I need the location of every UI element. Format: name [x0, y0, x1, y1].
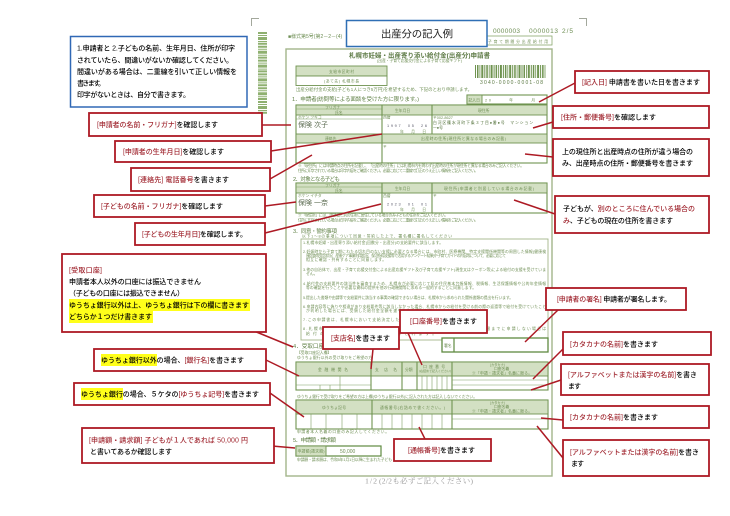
instructions box: 1.申請者と 2.子どもの名前、生年月日、住所が印字 [77, 44, 235, 52]
section 4 bank account: ※「申請・請求者」名義に限る。 [472, 408, 532, 414]
municipality box [296, 66, 387, 86]
callout: entry date: [記入日] 申請書を書いた日を書きます [582, 78, 700, 86]
form intro text: 出産分給付金の支給(子ども1人につき5万円)を希望するため、下記のとおり申請します。 [296, 86, 472, 93]
section 2 child: 西暦 [383, 193, 391, 198]
callout: address and postal code [553, 106, 709, 128]
section 3 consent [293, 227, 548, 340]
form title [349, 50, 491, 63]
section 1 applicant: 保険 次子 [298, 120, 328, 129]
form barcode: 3040-0000-0001-08 [480, 80, 543, 86]
consent items: 相互に確認・共有することに同意します。 [306, 257, 386, 262]
section 2 child: ※「現住所」には、申請者と別の住所に居住している場合のみ子どもの住所をご記入ください。 [298, 212, 448, 218]
callout: receiving account: どちらか１つだけ書きます [69, 312, 152, 321]
callout: child name: [子どもの名前・フリガナ]を確認します [101, 202, 223, 210]
section 4 bank account: 金融機関名 [318, 367, 348, 372]
section 5 requested amount: 申請額(請求額) [298, 448, 325, 454]
consent items: 7.この申請書は、札幌市において支給決定した後は、 [303, 317, 413, 322]
callout: child name [94, 195, 265, 217]
callout: applicant name [89, 113, 262, 136]
consent items: 6.申請内容等に偽りや相違があり支給要件等に該当しなかった場合、札幌市からの給付を受ける前の際の返還等で給付を受けていたこと [303, 304, 546, 309]
section 1 applicant: 西暦 [383, 114, 391, 120]
section 2 child: ホケン イチタ [298, 193, 322, 198]
callout: requested amount: [申請額・請求額] 子どもが１人であれば 50,000 円 [89, 436, 248, 444]
consent items: 1.札幌市妊婦・出産寄り添い給付金(回数分・出産分)の支給要件に該当します。 [303, 240, 443, 245]
section 1 applicant: フリガナ [325, 105, 340, 110]
section 5 requested amount: 5．申請額・請求額 [293, 436, 336, 444]
callout: child birth date [135, 223, 265, 245]
section 5 requested amount: 50,000 [340, 449, 356, 455]
callout: requested amount: と書いてあるか確認します [90, 447, 172, 456]
callout: alphabet or kanji name 1: ます [568, 382, 581, 390]
section 4 bank account: (右詰めで記入ください) [419, 368, 451, 373]
consent items: 5.提出した書類や由請等で支給要件に該当する事実の確認できない場合は、札幌市から求められた関係書類の提出を行います。 [303, 295, 513, 300]
section 2 child: 2023 01 01 [387, 202, 427, 206]
section 4 bank account: 申請者本人名義の口座のみ記入してください。 [297, 429, 389, 434]
section 2 child: フリガナ [325, 183, 340, 188]
callout: katakana name 1: [カタカナの名前]を書きます [570, 340, 658, 348]
instructions box: 間違いがある場合は、二重線を引いて正しい情報を [77, 67, 237, 76]
form title: (出産・子育て応援交付金による子育て応援ギフト) [377, 58, 463, 63]
section 1 applicant: 年 月 日 [400, 129, 426, 134]
callout: receiving account: ゆうちょ銀行以外は上、ゆうちょ銀行は下の欄に書きます [69, 300, 249, 310]
callout: yucho symbol: ゆうちょ銀行の場合、５ケタの[ゆうちょ記号]を書きます [81, 390, 259, 398]
instructions box: されていたら、間違いがないか確認してください。 [77, 56, 233, 64]
section 4 bank account: ゆうちょ銀行以外の受け取りをご希望の方 [297, 355, 372, 360]
section 1 applicant: 氏名 [335, 110, 343, 115]
section 1 applicant: 現住所 [478, 108, 490, 113]
form title: 札幌市妊婦・出産寄り添い給付金(出産分)申請書 [349, 50, 491, 60]
section 4 bank account: 口座名義 [494, 404, 509, 409]
callout: child's address [555, 196, 709, 233]
section 2 child: 氏名 [335, 188, 343, 193]
callout: katakana name 2 [563, 406, 709, 428]
section 4 bank account: (カタカナ) [490, 400, 505, 405]
section 4 bank account [293, 342, 548, 434]
callout: passbook number [394, 439, 491, 461]
consent items: 2.妊娠時から子育て期にわたる切れ目のない支援に必要となる場合には、市町村、医療機関、特定支援関係機関等の周囲した情報(健康検 [303, 249, 546, 254]
section 1 applicant: 記入日 [468, 98, 480, 102]
callout: applicant birth date [115, 141, 271, 162]
municipality box: (あて先) 札幌市長 [324, 78, 359, 84]
callout: katakana name 1 [563, 332, 711, 355]
section 4 bank account: 口座番号 [423, 364, 445, 369]
section 4 bank account: 支店名 [375, 367, 397, 372]
section 1 applicant: 〒 [383, 145, 387, 149]
callout: yucho symbol [74, 383, 270, 405]
form header code [288, 28, 573, 45]
callout: address and postal code: [住所・郵便番号]を確認します [561, 112, 656, 122]
callout: branch name: [支店名]を書きます [331, 334, 390, 342]
section 2 child: 2．対象となる子ども [293, 175, 340, 183]
form header code: 0000003 [493, 28, 520, 35]
form header code: ■様式第5号(第2－2－(4) [288, 33, 342, 40]
form header code: 2/5 [562, 28, 573, 35]
section 4 bank account: 口座名義 [494, 366, 509, 371]
section 3 consent: 以下1〜8の事項について同意・誓約した上で、署名欄に署名してください [302, 234, 452, 238]
side barcode [258, 32, 267, 114]
callout: account number: [口座番号]を書きます [410, 316, 477, 326]
section 1 applicant: 生年月日 [395, 108, 410, 113]
callout: phone contact [131, 168, 270, 191]
instructions box [70, 36, 247, 107]
signature box: 署名 [444, 343, 452, 348]
callout: receiving account: [受取口座] [69, 266, 102, 274]
section 5 requested amount: 申請額・請求額は、令和5年1月1日以降に生まれた子ども [297, 457, 392, 462]
section 4 bank account: 分類 [405, 367, 413, 372]
section 2 child: 現住所(申請者と別居している場合のみ記載) [444, 186, 535, 191]
callout: receiving account [62, 254, 266, 332]
callout: phone contact: [連絡先] 電話番号を書きます [138, 175, 229, 184]
form barcode [475, 72, 546, 86]
municipality box: 支給市区町村 [329, 69, 354, 74]
form outer frame [286, 49, 552, 476]
callout: alphabet or kanji name 1: [アルファベットまたは漢字の名前]を書き [568, 370, 697, 379]
crop marks [252, 18, 586, 26]
section 4 bank account: ※「申請・請求者」名義に限る。 [472, 370, 532, 376]
signature box [442, 338, 548, 352]
section 4 bank account: 【受取口座記入欄】 [297, 350, 331, 355]
section 4 bank account: 通帳番号(右詰めで書ください。) [380, 405, 446, 410]
section 4 bank account: ゆうちょ記号 [322, 405, 346, 410]
form header code: 0000013 [529, 28, 558, 35]
callout: non-yucho bank name [94, 349, 266, 371]
section 2 child: 住所に印字されている場合は印字内容をご確認ください。必要に応じて二重線で訂正のうえ正しい情報をご記入ください。 [298, 218, 478, 222]
section 2 child: 〒 [433, 194, 437, 198]
form header code: 子育て期間分出産給付用 [488, 39, 548, 44]
callout: katakana name 2: [カタカナの名前]を書きます [570, 412, 658, 422]
section 2 child: 保険 一奈 [298, 198, 328, 207]
callout: alphabet or kanji name 2 [563, 440, 709, 476]
consent items: 給付の請求をしないものとみなされます。 [306, 331, 436, 336]
instructions box: 書きます。 [77, 78, 105, 88]
callout: child birth date: [子どもの生年月日]を確認します。 [142, 230, 247, 238]
section 2 child: 年 月 日 [400, 207, 426, 212]
section 5 requested amount [293, 436, 392, 462]
leader lines [254, 83, 575, 458]
callout: requested amount [82, 428, 274, 463]
consent items: 等の確認を行うことや必要な資料の提供を他の行政機関等に求める一般的することに同意します。 [306, 285, 476, 290]
callout: account number [400, 310, 487, 333]
section 1 applicant: 〒002-8627 [433, 116, 453, 120]
title box: 出産分の記入例 [381, 28, 453, 40]
consent items: せん。 [306, 271, 317, 276]
callout: branch name [323, 327, 399, 349]
section 4 bank account: ゆうちょ銀行で受け取りをご希望の方は上欄(ゆうちょ銀行以外)に記入された方は記入しないでください。 [297, 394, 477, 399]
section 2 child [293, 175, 547, 222]
callout: alphabet or kanji name 2: [アルファベットまたは漢字の名前]を書き [570, 448, 699, 456]
section 1 applicant: ※「現住所」には申請時点の住所を記載し、「出産時の住所」には札幌市内を問わず出産時の住所が現住所と異なる場合のみご記入ください。 [298, 163, 524, 168]
section 1 applicant: 20 年 月 [485, 98, 535, 102]
consent items [303, 240, 546, 336]
callout: applicant signature [546, 288, 686, 310]
callout: applicant birth date: [申請者の生年月日]を確認します [123, 147, 224, 156]
section 4 bank account: (カタカナ) [490, 362, 505, 367]
section 1 applicant: 白河区篠水河町下条３丁目●番●号 マンション [433, 120, 533, 125]
callout: receiving account: （子どもの口座には振込できません） [69, 288, 184, 298]
callout: child's address: み、子どもの現在の住所を書きます [563, 216, 673, 225]
callout: receiving account: 申請者本人以外の口座には振込できません [69, 277, 201, 286]
section 1 applicant: 一●号 [433, 125, 443, 130]
consent items: が判明した場合には、受領した給付金全額を速やかに返還します。 [306, 308, 436, 313]
callout: alphabet or kanji name 1 [561, 364, 709, 395]
section 1 applicant [292, 95, 547, 173]
callout: address at birth: み、出産時点の住所・郵便番号を書きます [562, 158, 693, 168]
application form [286, 28, 573, 486]
consent items: 4.給付金の支給要件の該当性を審査するため、札幌市が必要に応じて私の住民基本台帳情報、税情報、生活保護情報や公的年金情報 [303, 281, 546, 286]
callout: address at birth [553, 139, 709, 176]
consent items: 3.他の自治体で、出産・子育て応援交付金による出産応援ギフト及び子育て応援ギフト(現金又はクーポン等)による給付の支援を受けていま [303, 267, 546, 272]
section 1 applicant: 1997 05 26 [387, 124, 427, 128]
section 1 applicant: 住所に印字されている場合は印字内容をご確認ください。必要に応じて二重線で訂正のうえ正しい情報をご記入ください。 [298, 168, 478, 173]
section 1 applicant: 1．申請者(訪問等による面談を受けた方に限ります。) [292, 95, 419, 103]
section 3 consent: 3．同意・誓約事項 [293, 227, 337, 235]
callout: address at birth: 上の現住所と出産時点の住所が違う場合の [562, 147, 693, 156]
callout: applicant signature: [申請者の署名] 申請者が署名します。 [557, 294, 671, 304]
callout: applicant name: [申請者の名前・フリガナ]を確認します [97, 120, 218, 129]
callout: alphabet or kanji name 2: ます [571, 460, 584, 468]
callout: passbook number: [通帳番号]を書きます [408, 446, 475, 454]
callout: non-yucho bank name: ゆうちょ銀行以外の場合、[銀行名]を書きます [101, 356, 244, 364]
section 2 child: 生年月日 [395, 186, 410, 191]
page number: 1/2 [365, 476, 377, 486]
page number: (2/2も必ずご記入ください) [379, 476, 473, 486]
instructions box: 印字がないときは、自分で書きます。 [77, 90, 190, 99]
callout: child's address: 子どもが、別のところに住んでいる場合の [563, 204, 695, 213]
consent items: 8.札幌市からの問い合わせ等に対し、誠実に応じます。また出産日等に定める期限までに申請しない場合は [303, 326, 546, 331]
callout: entry date [575, 71, 709, 93]
section 1 applicant: ホケン ツギコ [298, 114, 322, 120]
section 1 applicant: 出産時の住所(現住所と異なる場合のみ記載) [421, 136, 507, 141]
title box [346, 20, 487, 46]
section 4 bank account: 4．受取口座 [293, 342, 324, 350]
consent items: 康診査等受診状況、産後ケア事業利用状況、保活指導支援等で活用するアンケート結果)や子育てガイドの内容等について、必要に応じて [306, 253, 506, 258]
section 1 applicant: 連絡先 [325, 136, 337, 141]
